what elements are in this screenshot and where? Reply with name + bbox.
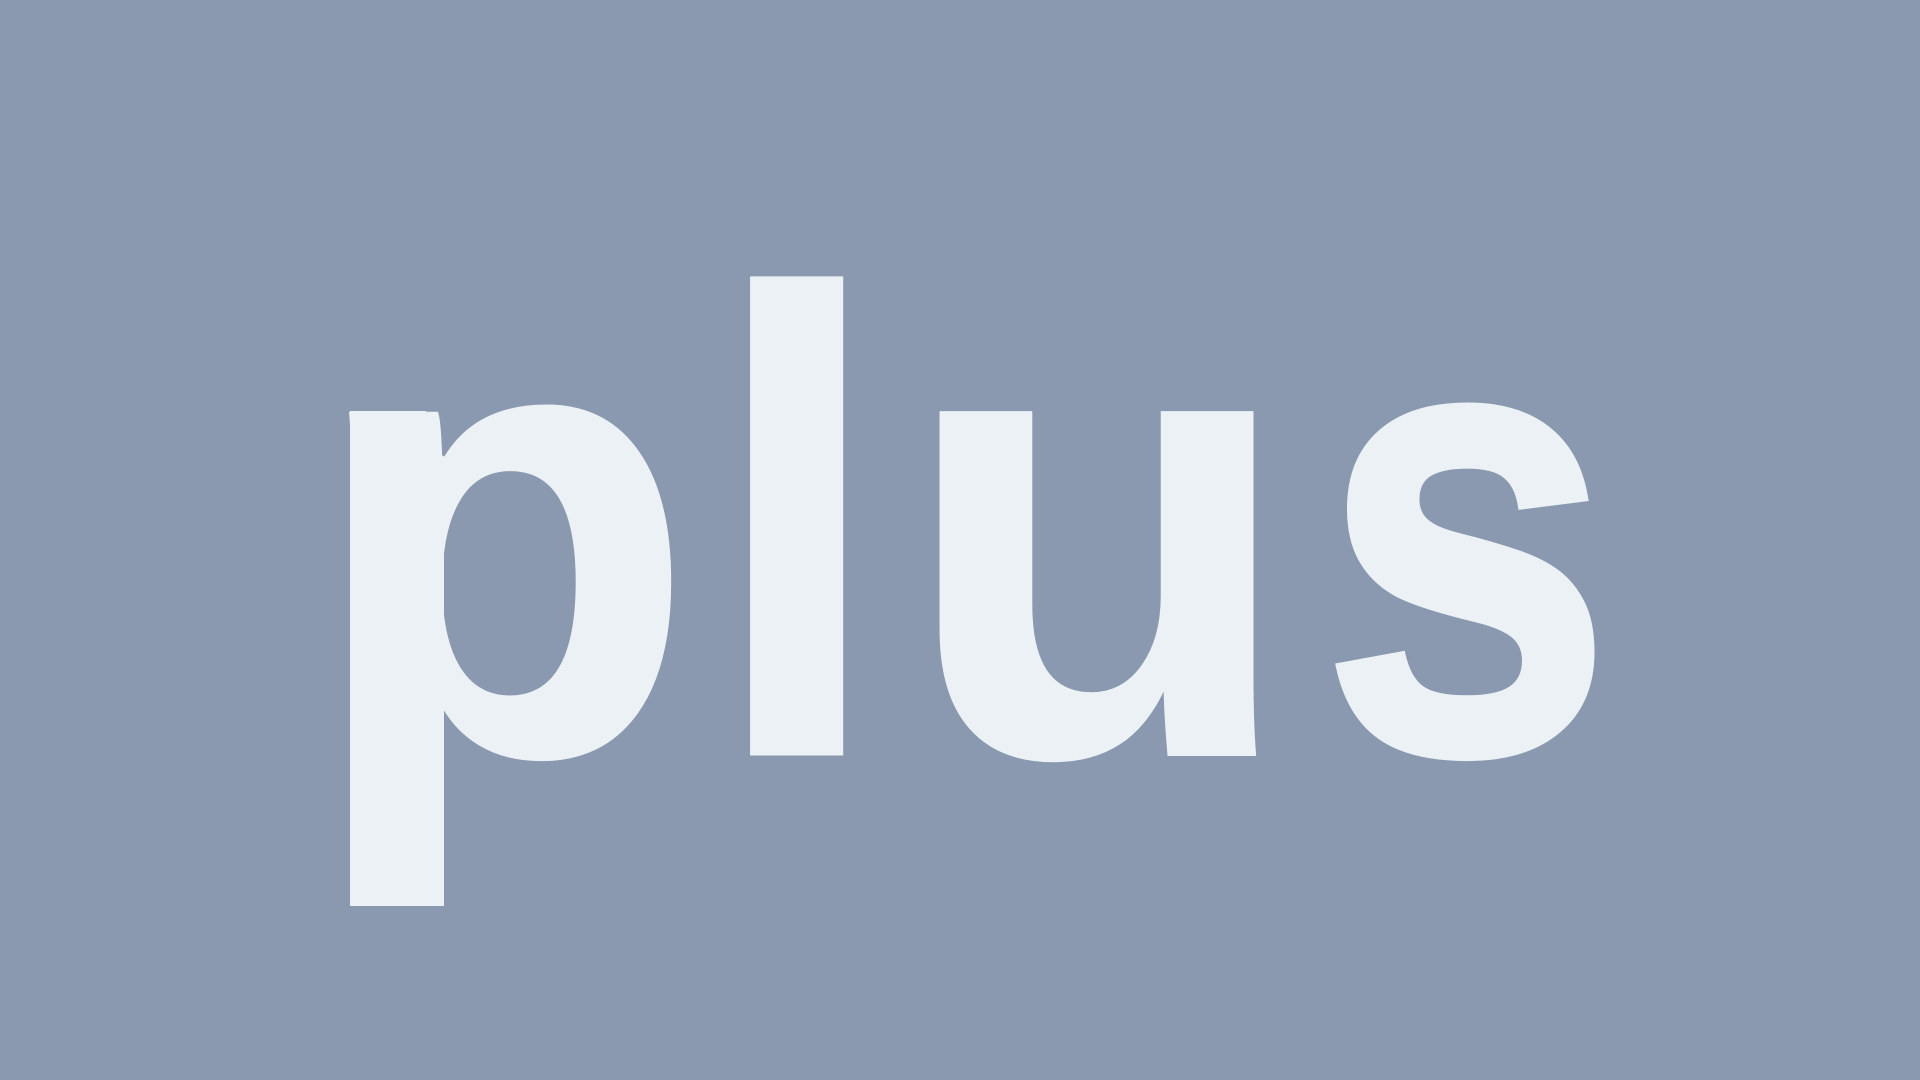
letter p: p: [311, 175, 694, 892]
letter s: s: [1321, 173, 1613, 888]
letter u: u: [901, 170, 1297, 891]
letter l: l: [706, 160, 888, 894]
title: plus: [311, 160, 1613, 906]
